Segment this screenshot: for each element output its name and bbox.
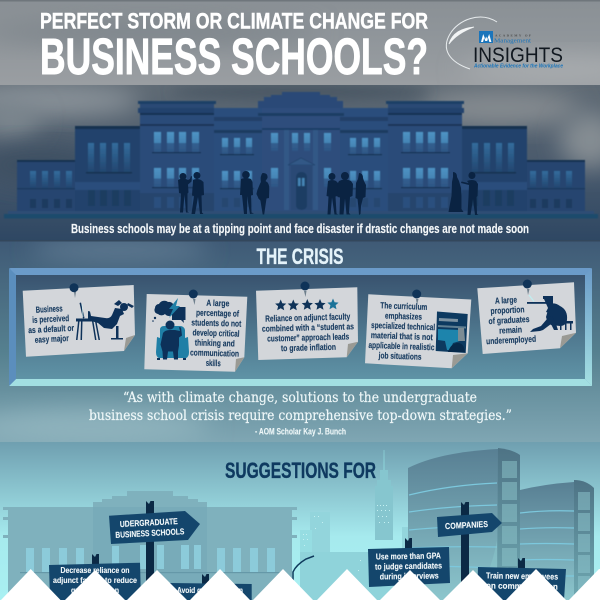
sign: use more than GPA [368, 538, 450, 587]
note 2 text: communication [190, 347, 239, 359]
logo: AOM Insights [446, 17, 563, 70]
icon: reclining person at desk [76, 300, 134, 340]
note 5 text: proportion [490, 304, 525, 316]
note 4 text: specialized technical [371, 320, 435, 332]
heading: the crisis: THE CRISIS [256, 244, 344, 269]
note 5 text: underemployed [486, 334, 536, 346]
note 3 text: Reliance on adjunct faculty [265, 311, 350, 324]
note 4 text: applicable in realistic [368, 340, 435, 352]
note 2 text: develop critical [192, 327, 240, 339]
person 3 [240, 171, 254, 214]
person 5 [326, 173, 338, 214]
person 8 [448, 172, 464, 212]
pin [523, 280, 532, 295]
sign: train new employees: Train new employees [486, 570, 558, 582]
signpost: undergraduate business schools: UDERGRADUATE [120, 516, 178, 529]
signpost: undergraduate business schools [109, 501, 200, 600]
note 4 text: job situations [378, 350, 422, 362]
sign: train new employees [477, 558, 566, 600]
heading: suggestions for: SUGGESTIONS FOR [225, 458, 376, 483]
logo: AOM Insights: ACADEMY OF [495, 34, 531, 38]
icon: screen with thumbs down [436, 312, 468, 353]
icon: hunched graduate on stool [527, 295, 573, 332]
person 6 [337, 172, 353, 214]
note 2 text [190, 297, 242, 369]
pin [412, 290, 421, 305]
signpost: companies: COMPANIES [445, 519, 488, 531]
signpost: companies [437, 502, 502, 600]
office building front [408, 448, 520, 600]
note 5 text: A large [495, 295, 517, 306]
title: PERFECT STORM OR CLIMATE CHANGE FOR [40, 8, 428, 34]
panel: the crisis background [0, 238, 600, 446]
note 3 text: customer” approach leads [267, 331, 349, 344]
note 5 text: remain [499, 324, 522, 336]
note 3 text [262, 311, 355, 354]
note 4 text: material that is not [371, 330, 433, 342]
ground strip [4, 211, 598, 218]
sign: avoid: Avoid grade inflation [177, 585, 243, 595]
person 1 [178, 173, 192, 212]
torn white edge [1, 569, 600, 600]
note 2 [144, 290, 247, 372]
note 1 text: Business [35, 303, 63, 315]
office building back [520, 480, 594, 600]
person 4 [256, 173, 269, 214]
panel: crisis board [9, 268, 592, 386]
person 2 [192, 172, 204, 214]
people silhouettes [178, 171, 478, 215]
quote: business school crisis require comprehensive top-down strategies.” [89, 408, 512, 424]
note 2 text: thinking and [195, 337, 235, 349]
quote: “As with climate change, solutions to the undergraduate [123, 390, 477, 406]
sign: decrease reliance [49, 554, 141, 600]
street lamp [293, 556, 314, 600]
star rating [275, 298, 339, 310]
note 4 text [368, 300, 436, 362]
note 2 text: percentage of [196, 307, 239, 319]
building: central block [258, 92, 344, 211]
note 3 text: combined with a “student as [262, 321, 354, 334]
logo: AOM Insights: Management [494, 38, 531, 44]
panel: suggestions background [0, 442, 600, 600]
sign: decrease reliance: grade inflation [71, 585, 119, 595]
signpost: undergraduate business schools: BUSINESS SCHOOLS [115, 526, 185, 540]
sign: decrease reliance: Decrease reliance on [60, 565, 130, 575]
sign: decrease reliance: adjunct faculty to reduce [53, 575, 137, 585]
quote [89, 390, 512, 436]
sign: avoid [170, 574, 252, 600]
pin [300, 282, 310, 297]
person 9 [461, 172, 478, 215]
panel: header band [0, 0, 600, 85]
logo: AOM Insights: Actionable Evidence for the Workplace [473, 64, 563, 70]
sign: use more than GPA: Use more than GPA [376, 550, 441, 562]
note 1 text: is perceived [32, 313, 69, 325]
sign: use more than GPA: during interviews [380, 570, 439, 581]
note 5 text: of graduates [488, 314, 530, 326]
panel: stormy sky [0, 84, 600, 241]
note 4 text: The curriculum [380, 300, 428, 312]
note 1 text: as a default or [28, 323, 75, 335]
note 2 text: skills [206, 358, 221, 368]
note 5 [477, 280, 576, 354]
note 3 text: to grade inflation [281, 342, 336, 353]
pin [70, 283, 78, 298]
building: right half [340, 101, 585, 211]
building: left half [17, 101, 262, 211]
sign: use more than GPA: to judge candidates [375, 560, 442, 572]
icon: stressed person in armchair [152, 298, 189, 360]
quote attribution: - AOM Scholar Kay J. Bunch [255, 426, 346, 436]
note 2 text: students do not [191, 317, 241, 329]
pin [189, 290, 198, 305]
note 1 text [27, 303, 75, 345]
building: undergraduate school silhouette [3, 491, 297, 600]
title [40, 8, 428, 85]
note 5 text [484, 294, 536, 346]
sign: train new employees: on communication [486, 580, 558, 592]
city skyline [300, 450, 410, 600]
person 7 [356, 173, 366, 215]
note 1 [23, 283, 135, 357]
note 3 [256, 282, 358, 360]
note 4 text: emphasizes [385, 310, 422, 322]
illustration: business school building [4, 92, 598, 218]
note 4 [365, 290, 471, 368]
logo: AOM Insights: INSIGHTS [473, 43, 563, 67]
note 1 text: easy major [34, 333, 69, 345]
note 2 text: A large [206, 298, 230, 308]
title: BUSINESS SCHOOLS? [40, 28, 428, 85]
